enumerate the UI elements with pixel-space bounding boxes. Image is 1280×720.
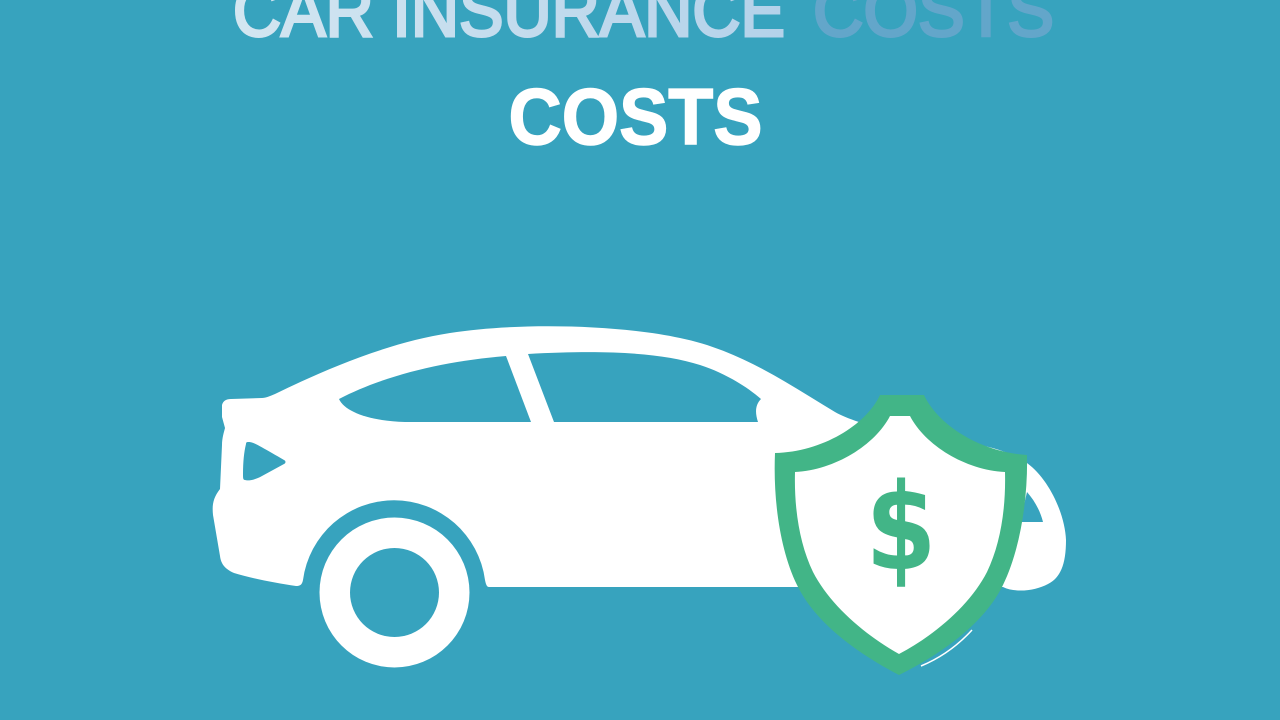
shield (775, 395, 1027, 675)
rear window (339, 356, 531, 422)
tail light (243, 442, 286, 480)
dollar sign: $ (866, 459, 936, 598)
rear wheel hub (350, 548, 439, 637)
title: costs: COSTS (508, 72, 762, 161)
car body (213, 326, 1066, 591)
front wheel crescent (921, 630, 972, 666)
front light (1020, 492, 1043, 522)
icon: car (213, 326, 1066, 668)
front window (528, 352, 761, 422)
icon: shield with dollar (775, 395, 1027, 675)
rear wheel (320, 518, 470, 668)
